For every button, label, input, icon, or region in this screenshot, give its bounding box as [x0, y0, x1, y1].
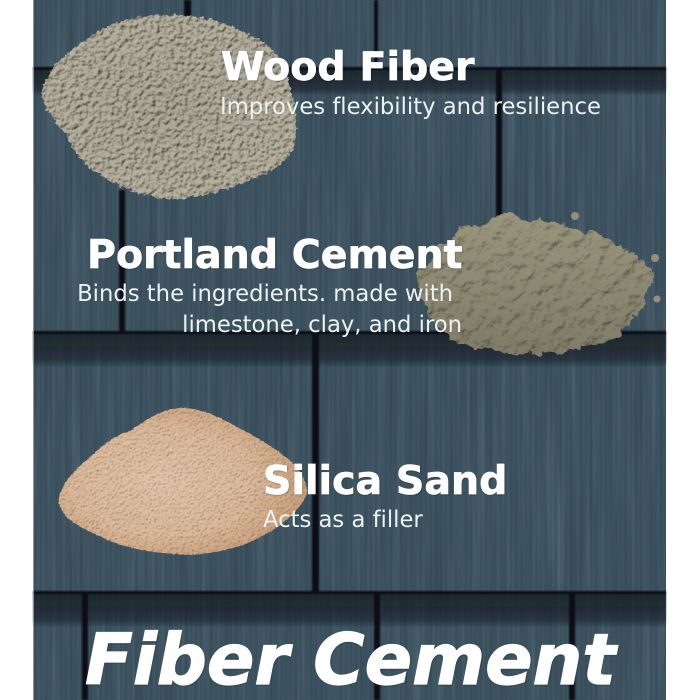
- description: Portland Cement: [77, 281, 462, 338]
- heading: Portland Cement: Portland Cement: [87, 232, 463, 278]
- pile: wood fiber: [42, 14, 297, 199]
- description: Wood Fiber: Improves flexibility and resilience: [220, 94, 601, 120]
- heading: Wood Fiber: Wood Fiber: [221, 44, 475, 90]
- pile: silica sand: [59, 408, 307, 555]
- pile: portland cement: [417, 212, 660, 354]
- description: Portland Cement: limestone, clay, and iron: [182, 312, 462, 338]
- description: Portland Cement: Binds the ingredients. made with: [77, 281, 453, 307]
- heading: Silica Sand: Silica Sand: [263, 458, 507, 504]
- title: Fiber Cement: [85, 619, 618, 700]
- description: Silica Sand: Acts as a filler: [263, 507, 423, 533]
